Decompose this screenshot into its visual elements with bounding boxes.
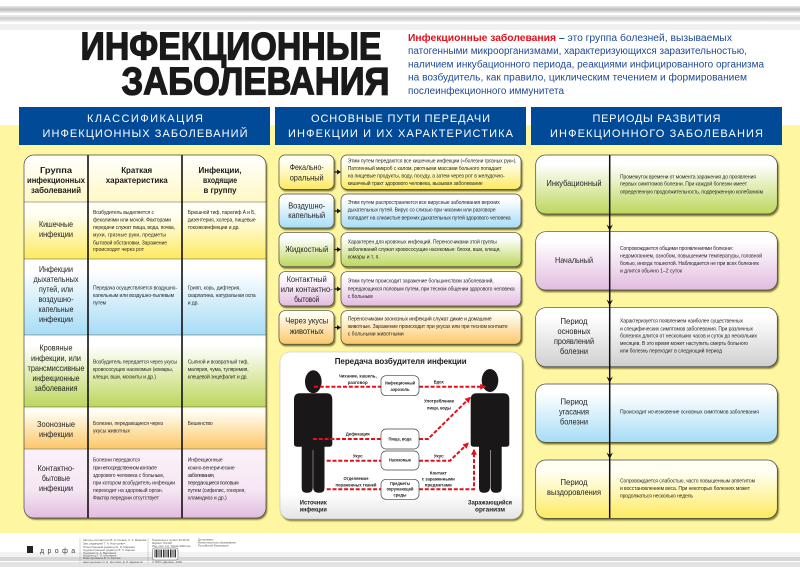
route: airborne — [279, 194, 521, 228]
period: initial: Сопровождается общими проявлениями болезни: — [620, 246, 733, 252]
timeline arrow — [606, 155, 613, 518]
period: initial: болью, иногда тошнотой. Наблюдается не при всех болезнях — [620, 260, 760, 267]
imprint text: Цветоделение О. Н. Жеглова, Д. И. Дарвиной — [83, 560, 143, 564]
route: contact: бытовой — [294, 294, 319, 304]
table header row: Краткая — [121, 165, 152, 175]
period: main manifestations: Характеризуется появлением наиболее существенных — [620, 319, 744, 325]
route: contact: Этим путем происходит заражение большинством заболеваний, — [348, 277, 494, 284]
route labels: предметами — [425, 484, 452, 489]
route: fecal-oral — [279, 155, 521, 189]
route labels: Употребление — [424, 398, 454, 405]
row: contact infections: хламидиоз и др.) — [188, 495, 227, 501]
caption: source of infection: Источник — [300, 500, 327, 506]
row: blood infections: инфекционные — [32, 373, 80, 383]
row: intestinal infections: происходит через рот — [93, 247, 145, 253]
row: contact infections: переходит на здоровый орган. — [93, 487, 163, 494]
definition text block: патогенными микроорганизмами, характеризующихся заразительностью, — [408, 46, 747, 57]
imprint text: Формат 70х100 — [152, 541, 172, 545]
definition text block: наличием инкубационного периода, реакциями инфицированного организма — [408, 59, 764, 71]
row: contact infections: передающиеся половым — [188, 481, 239, 487]
column heading: classification — [19, 107, 270, 145]
definition text block: Инфекционные заболевания – это группа болезней, вызываемых — [408, 32, 732, 44]
route: fecal-oral: Этим путем передаются все кишечные инфекции («болезни грязных рук»). — [348, 158, 517, 164]
route labels: Дефекация — [346, 431, 370, 438]
route: animal bites: животные. Заражение происходит при укусах или при тесном контакте — [348, 324, 508, 330]
route: contact: передающихся половым путем, при тесном общении здорового человека — [348, 286, 515, 292]
row: contact infections: Инфекционные — [188, 458, 223, 464]
row: intestinal infections — [39, 209, 256, 253]
period: main manifestations: основных — [558, 326, 591, 336]
route labels: пораженных тканей — [336, 482, 377, 489]
row: respiratory infections: капельные — [38, 304, 74, 314]
node: aerosol: аэрозоль — [390, 388, 410, 393]
period: main manifestations: болезнях длится от нескольких часов и суток до нескольких — [620, 334, 758, 340]
caption: infected organism — [468, 499, 512, 513]
row: zoonotic infections: инфекции — [39, 429, 73, 439]
imprint text: Художник А. А. Варламов — [83, 551, 117, 555]
period: recovery: выздоровления — [547, 487, 601, 497]
imprint text: Изд. лист 1,0. Тираж 3000 экз. — [152, 544, 191, 548]
route: liquid: Жидкостный — [285, 244, 328, 254]
row: contact infections: бытовые — [42, 473, 70, 483]
row: respiratory infections: Передача осуществляется воздушно- — [93, 285, 177, 291]
caption: infected organism: Заражающийся — [468, 499, 512, 506]
route: airborne: Воздушно- — [288, 200, 325, 210]
route: liquid: заболеваний служат кровососущие насекомые: блохи, вши, клещи, — [348, 246, 501, 253]
column heading: periods: ПЕРИОДЫ РАЗВИТИЯ — [592, 113, 721, 125]
period: incubation: Промежуток времени от момента заражения до проявления — [620, 174, 756, 180]
route: fecal-oral: Патогенный микроб с калом, рвотными массами больного попадает — [348, 165, 502, 172]
definition text block — [408, 32, 764, 97]
route: airborne: капельный — [288, 210, 325, 220]
row: intestinal infections: Возбудитель выделяется с — [93, 210, 154, 216]
imprint text: Макетирование В. С. Беляев — [83, 556, 121, 560]
row: zoonotic infections — [37, 419, 213, 439]
imprint text — [80, 538, 236, 564]
period: initial: Начальный — [555, 255, 593, 265]
imprint text: Российской Федерации — [198, 544, 229, 548]
row: contact infections: кожно-венерические — [188, 465, 235, 471]
imprint text: Ответственный редактор Е. И. Маркова — [83, 545, 135, 549]
publisher logo: дрофа — [40, 548, 79, 555]
panel: periods of disease — [536, 155, 777, 518]
table header row — [27, 165, 242, 195]
imprint text: © ООО «Дрофа», 2006 — [152, 560, 182, 564]
panel: pathogen transmission diagram — [280, 352, 522, 519]
row: respiratory infections — [34, 264, 256, 324]
period: decline — [536, 384, 777, 442]
period: main manifestations: Период — [560, 316, 588, 326]
period: main manifestations — [536, 308, 777, 367]
column heading: transmission routes: ОСНОВНЫЕ ПУТИ ПЕРЕДАЧИ — [311, 113, 490, 125]
row: intestinal infections: инфекции — [39, 229, 73, 239]
node: surrounding objects: окружающей — [386, 486, 414, 493]
row: contact infections: путем (сифилис, гонорея, — [188, 488, 246, 494]
row: intestinal infections: Брюшной тиф, паратиф А и Б, — [188, 209, 256, 216]
row: intestinal infections: дизентерия, холера, пищевые — [188, 218, 256, 224]
definition text block: послеинфекционного иммунитета — [408, 85, 564, 97]
period: recovery: и восстановлением веса. При некоторых болезнях может — [620, 486, 751, 492]
caption: source of infection: инфекции — [300, 506, 327, 513]
diagram title: Передача возбудителя инфекции — [335, 356, 467, 366]
route: animal bites: с больными животными — [348, 332, 404, 338]
row: zoonotic infections: Бешенство — [188, 421, 213, 427]
title — [80, 26, 390, 104]
node: surrounding objects: Предметы — [390, 481, 410, 487]
row: intestinal infections: мухи, грязные руки, предметы — [93, 233, 166, 239]
route labels: Укус — [434, 453, 444, 459]
row: blood infections: Кровяные — [40, 342, 73, 352]
route: fecal-oral: оральный — [290, 172, 324, 182]
row: respiratory infections: Грипп, корь, дифтерия, — [188, 285, 241, 291]
route: fecal-oral: на пищевые продукты, воду, посуду, а затем через рот в желудочно- — [348, 174, 505, 180]
node: food and water: Пища, вода — [388, 437, 412, 443]
period: main manifestations: болезни — [560, 346, 588, 356]
column heading: classification: ИНФЕКЦИОННЫХ ЗАБОЛЕВАНИЙ — [42, 127, 248, 140]
row: contact infections — [38, 458, 246, 501]
period: recovery — [536, 460, 777, 518]
figure: source of infection — [294, 370, 332, 493]
row: blood infections: клещи, вши, москиты и др.) — [93, 375, 156, 381]
route labels: Отделяемое — [344, 476, 369, 482]
row: respiratory infections: Инфекции — [39, 264, 73, 274]
period: initial: и длится обычно 1–2 суток — [620, 269, 683, 275]
row: respiratory infections: капельным или воздушно-пылевым — [93, 293, 175, 299]
table header row: характеристика — [106, 175, 168, 185]
column heading: periods: ИНФЕКЦИОННОГО ЗАБОЛЕВАНИЯ — [550, 128, 763, 140]
column heading: transmission routes — [275, 107, 526, 145]
definition text block: на возбудитель, как правило, циклическим течением и формированием — [408, 72, 747, 84]
route: liquid: Характерен для кровяных инфекций. Переносчиками этой группы — [348, 238, 497, 245]
route labels — [336, 373, 455, 489]
row: respiratory infections: путей, или — [39, 284, 73, 294]
imprint text: Художественный редактор В. Л. Ларина — [83, 548, 135, 552]
route labels: пищи, воды — [427, 406, 451, 411]
row: respiratory infections: скарлатина, натуральная оспа — [188, 293, 256, 299]
period: main manifestations: или болезнь переходит в следующий период — [620, 347, 722, 354]
row: intestinal infections: фекалиями или мочой. Факторами — [93, 217, 171, 224]
imprint text: Корректор Г. И. Мосякина — [83, 554, 117, 558]
table header row: Группа — [40, 165, 72, 175]
route labels: Чихание, кашель, — [339, 373, 377, 379]
row: blood infections: клещевой энцефалит и др. — [188, 374, 248, 381]
panel: transmission routes — [279, 155, 521, 344]
period: decline: угасания — [559, 406, 589, 416]
route: contact — [279, 272, 521, 306]
row: zoonotic infections: Зоонозные — [37, 419, 75, 429]
row: contact infections: здорового человека с больным, — [93, 473, 164, 479]
table header row: в группу — [204, 185, 237, 195]
node: surrounding objects — [381, 479, 419, 499]
node: food and water — [381, 429, 419, 449]
row: contact infections: инфекции — [39, 483, 73, 493]
period: decline: Происходит исчезновение основных симптомов заболевания — [620, 409, 759, 415]
row: respiratory infections: и др. — [188, 300, 199, 306]
period: incubation: Инкубационный — [546, 178, 602, 188]
publisher logo — [27, 546, 79, 555]
route labels: разговор — [348, 381, 368, 386]
dashed transmission arrows — [313, 387, 485, 489]
route: animal bites: Переносчиками зоонозных инфекций служат дикие и домашние — [348, 316, 492, 323]
route: liquid: комары и т. п. — [348, 254, 380, 260]
period: main manifestations: месяцев. В это время может наступить смерть больного — [620, 341, 748, 347]
imprint text: Подписано к печати 30.05.06 — [152, 538, 190, 542]
row: contact infections: Фактор передачи отсутствует — [93, 495, 160, 501]
row: contact infections: при котором возбудитель инфекции — [93, 481, 175, 487]
row: intestinal infections: токсикоинфекции и др. — [188, 225, 240, 231]
period: main manifestations: проявлений — [554, 336, 594, 346]
period: decline: болезни — [560, 416, 588, 426]
table header row: инфекционных — [27, 175, 85, 185]
node: aerosol — [381, 376, 419, 396]
caption: source of infection — [300, 500, 327, 513]
node: insects — [381, 451, 419, 470]
route labels: Вдох — [434, 379, 444, 385]
title: ИНФЕКЦИОННЫЕ — [80, 26, 382, 68]
node: insects: Насекомые — [389, 458, 411, 464]
column heading: transmission routes: ИНФЕКЦИИ И ИХ ХАРАКТЕРИСТИКА — [288, 128, 514, 140]
row: blood infections: малярия, чума, туляремия, — [188, 367, 249, 373]
row: blood infections: кровососущих насекомых (комары, — [93, 367, 173, 373]
route: animal bites — [279, 311, 521, 344]
period: incubation: первых симптомов болезни. При каждой болезни имеет — [620, 181, 748, 188]
imprint text: Министерством образования — [198, 540, 236, 544]
row: zoonotic infections: Болезни, передающиеся через — [93, 421, 164, 427]
row: blood infections: Сыпной и возвратный тиф, — [188, 358, 249, 365]
route: airborne: дыхательных путей. Вирус со слизью при чихании или разговоре — [348, 207, 496, 214]
route: contact: Контактный — [287, 274, 327, 284]
period: recovery: продолжаться несколько недель — [620, 493, 693, 499]
route: liquid — [279, 233, 521, 267]
route: fecal-oral: Фекально- — [290, 162, 324, 172]
bottom paper fold bands — [0, 533, 800, 571]
row: contact infections: заболевания, — [188, 473, 215, 479]
column heading: periods — [531, 107, 782, 145]
row: respiratory infections: дыхательных — [34, 274, 79, 284]
row: contact infections: Контактно- — [38, 463, 75, 473]
route: animal bites: животных — [290, 326, 324, 336]
imprint text: Дотировано — [198, 538, 214, 542]
row: blood infections: заболевания — [34, 383, 78, 393]
route: fecal-oral: кишечный тракт здорового человека, вызывая заболевание — [348, 180, 483, 187]
row: blood infections: Возбудитель передается через укусы — [93, 359, 177, 365]
imprint text: Авторы-составители В. Н. Катаев, С. А. Маркова — [83, 538, 147, 542]
route: contact: с больным — [348, 294, 373, 300]
route labels: Контакт — [430, 470, 447, 476]
period: incubation — [536, 155, 777, 214]
row: contact infections: при непосредственном контакте — [93, 465, 157, 471]
yellow background — [0, 125, 800, 533]
node: surrounding objects: среды — [394, 494, 406, 499]
row: respiratory infections: воздушно- — [38, 294, 74, 304]
row: blood infections — [28, 342, 249, 393]
caption: infected organism: организм — [475, 507, 506, 513]
period: initial: недомоганием, ознобом, повышением температуры, головной — [620, 253, 762, 260]
column heading: classification: КЛАССИФИКАЦИЯ — [87, 113, 203, 125]
route: airborne: попадает на слизистые верхних дыхательных путей здорового человека — [348, 214, 511, 221]
row: respiratory infections: инфекции — [39, 314, 73, 324]
period: incubation: определенную продолжительность, подверженную колебаниям — [620, 189, 764, 195]
route labels: с зараженными — [422, 478, 455, 483]
row: intestinal infections: бытовой обстановки. Заражение — [93, 239, 167, 246]
panel: classification table — [24, 155, 266, 518]
title: ЗАБОЛЕВАНИЯ — [122, 60, 390, 104]
table header row: входящие — [203, 175, 237, 185]
row: blood infections: трансмиссивные — [28, 363, 85, 373]
period: recovery: Период — [560, 477, 588, 487]
row: blood infections: инфекции, или — [31, 353, 81, 363]
period: initial — [536, 232, 777, 290]
table header row: Инфекции, — [198, 165, 242, 175]
route labels: Укус — [353, 453, 363, 459]
route: animal bites: Через укусы — [285, 316, 328, 326]
period: decline: Период — [560, 396, 588, 406]
figure: infected organism — [471, 369, 509, 493]
top paper fold bands — [0, 6, 800, 30]
period: recovery: Сопровождается слабостью, часто повышенным аппетитом — [620, 478, 756, 484]
route: airborne: Этим путем распространяются все вирусные заболевания верхних — [348, 200, 500, 206]
route: contact: или контактно- — [281, 284, 333, 294]
table header row: заболеваний — [31, 185, 81, 195]
barcode — [152, 548, 178, 560]
node: aerosol: Инфекционный — [385, 380, 415, 386]
imprint text: Зав. редакцией Т. А. Настусевич — [83, 542, 126, 546]
row: intestinal infections: Кишечные — [39, 219, 73, 229]
row: zoonotic infections: укусы животных — [93, 428, 130, 434]
period: main manifestations: и специфических симптомов заболевания. При различных — [620, 326, 754, 332]
row: intestinal infections: передачи служат пища, вода, почва, — [93, 225, 175, 231]
row: respiratory infections: путем — [93, 300, 107, 306]
row: contact infections: Болезни передаются — [93, 458, 140, 464]
